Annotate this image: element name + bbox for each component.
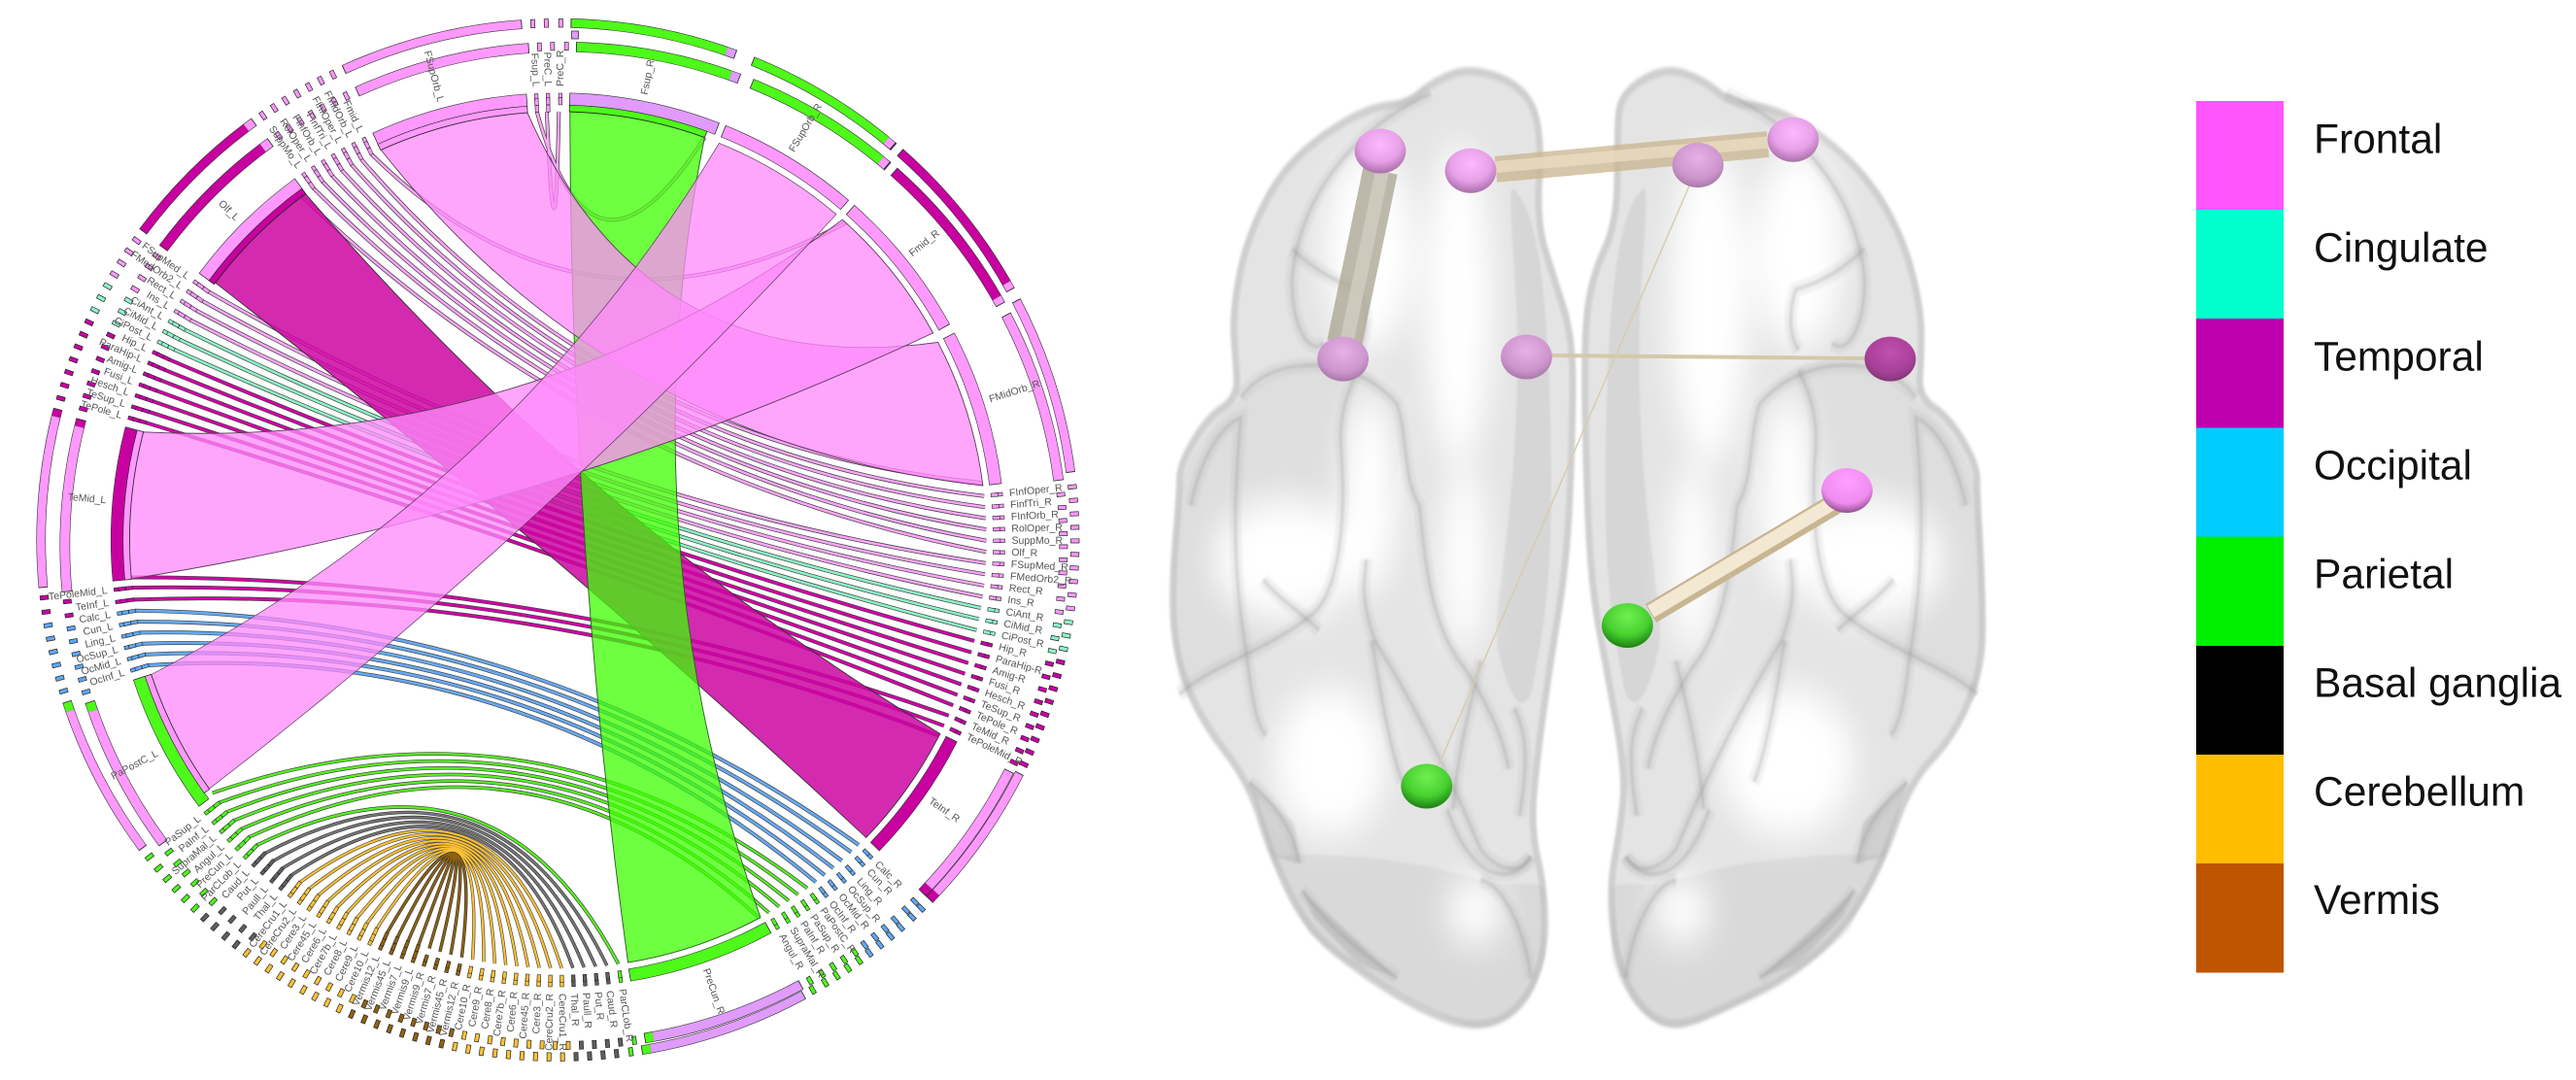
region name labels: Paull_L <box>240 884 271 917</box>
region name labels: FInfOrb_R <box>1011 509 1060 523</box>
region name labels: CiAnt_L <box>128 294 166 322</box>
region name labels: TeSup_R <box>979 698 1023 725</box>
region name labels: ParCLob_L <box>199 859 244 904</box>
region name labels: Vermis45_R <box>424 977 450 1034</box>
region name labels: FSupMed_R <box>1010 558 1068 573</box>
legend labels: Basal ganglia <box>2314 660 2562 707</box>
region name labels: PaSup_R <box>807 912 842 956</box>
region name labels: Fsup_R <box>639 58 658 96</box>
legend labels: Parietal <box>2314 552 2454 598</box>
region name labels: Cere9_L <box>333 943 361 984</box>
region name labels: SuppMo_L <box>266 123 304 171</box>
region name labels: Vermis9_R <box>401 970 427 1022</box>
region name labels: OcMid_L <box>80 656 122 678</box>
region name labels: Cere10_R <box>453 983 473 1031</box>
region name labels: ParaHip-L <box>97 336 144 365</box>
panel: legend <box>2196 101 2562 973</box>
region name labels: Thal_R <box>568 994 581 1027</box>
legend labels: Frontal <box>2314 117 2442 163</box>
region name labels: CereCru2_L <box>257 906 299 958</box>
region name labels: Caud_R <box>603 990 620 1029</box>
ribbon: Fmid_R to TeMid_L (frontal) <box>129 219 933 579</box>
region name labels: Hesch_L <box>89 375 131 398</box>
region name labels: TeInf_L <box>75 597 110 614</box>
region name labels: Calc_L <box>79 609 112 625</box>
region name labels: PreC_R <box>555 50 566 86</box>
region name labels: Vermis7_R <box>414 974 439 1026</box>
region name labels: RolOper_L <box>277 117 314 164</box>
region name labels: TeMid_R <box>969 721 1011 748</box>
region name labels: Ling_R <box>854 876 885 908</box>
region name labels: OcSup_L <box>75 644 119 665</box>
left hemisphere <box>1173 71 1573 1029</box>
region name labels: Cere7b_R <box>491 989 509 1037</box>
region name labels: Fsup_L <box>528 52 542 87</box>
legend colour bar <box>2196 101 2284 973</box>
region name labels: FSupOrb_R <box>787 101 825 154</box>
region name labels: Hip_L <box>119 332 150 354</box>
region name labels: PaPostC_L <box>109 748 160 782</box>
region name labels: FInfTri_L <box>304 111 334 152</box>
region name labels: Cere10_L <box>342 949 372 995</box>
region name labels: PaPostC_R <box>817 905 858 956</box>
region name labels: Cere7b_L <box>308 931 340 977</box>
region name labels: ParCLob_R <box>616 988 635 1043</box>
region name labels: Vermis9_L <box>390 966 416 1016</box>
region name labels: Cere8_R <box>479 988 496 1029</box>
region name labels: Amig-L <box>105 354 140 376</box>
panel: thin mirror connections of circular connectogram <box>131 112 987 987</box>
region name labels: FinfTri_R <box>1010 496 1053 511</box>
region name labels: Olf_L <box>216 198 242 223</box>
region name labels: PaSup_L <box>163 813 203 848</box>
region name labels: OcInf_L <box>88 667 126 689</box>
region name labels: Vermis12_L <box>351 954 383 1008</box>
region name labels: Fmid_R <box>907 227 942 259</box>
region name labels: Cere6_R <box>505 991 521 1032</box>
region name labels: CiMid_L <box>121 305 160 333</box>
region name labels: Hip_R <box>998 641 1028 659</box>
region name labels: Hesch_R <box>983 688 1027 713</box>
region name labels: CereCru2_R <box>543 993 556 1051</box>
region name labels: TeMid_L <box>67 491 107 506</box>
region name labels: TePole_L <box>80 398 123 422</box>
region name labels: Angul_R <box>776 932 806 972</box>
region name labels: PaInf_L <box>177 824 212 855</box>
region name labels: Fusi_L <box>102 366 135 388</box>
region name labels: FSupMed_L <box>140 240 191 282</box>
legend labels: Occipital <box>2314 443 2472 489</box>
brain region nodes <box>1317 118 1915 808</box>
region name labels: TePoleMid_R <box>965 731 1025 768</box>
ribbon: Fsup_R to PreCun_R (parietal) <box>570 112 761 962</box>
outer track 1: large region segments <box>41 23 1075 1057</box>
region name labels: FMedOrb2_L <box>128 249 185 292</box>
region name labels: CiMid_R <box>1002 618 1044 637</box>
region name labels: Thal_L <box>252 892 281 923</box>
region name labels: PreC_L <box>541 51 554 86</box>
right hemisphere <box>1585 71 1983 1029</box>
brain connections: cylinders between nodes <box>1344 142 1865 765</box>
region name labels: CiPost_L <box>112 315 154 344</box>
region name labels: Amig-R <box>991 664 1027 686</box>
inner track: large region segments <box>117 99 999 981</box>
region name labels: Cere45_R <box>518 992 532 1039</box>
region name labels: Cere45_L <box>286 920 320 963</box>
region name labels: FMidOrb_R <box>988 378 1041 405</box>
region name labels: Rect_R <box>1008 583 1044 597</box>
region name labels: SuppMo_R <box>1011 535 1063 547</box>
region name labels: CereCru1_R <box>557 994 568 1051</box>
region name labels: FMidOrb_L <box>322 89 356 140</box>
region name labels: Cere6_L <box>299 926 329 965</box>
region name labels: Put_L <box>235 875 261 903</box>
legend labels: Cingulate <box>2314 225 2489 272</box>
region name labels: TePole_R <box>974 710 1020 737</box>
region name labels: Cere9_R <box>466 985 485 1028</box>
region name labels: OcMid_R <box>836 892 871 932</box>
region name labels: Put_R <box>592 992 606 1021</box>
region name labels: Ins_R <box>1007 594 1035 609</box>
region name labels: SupraMal_R <box>788 926 827 980</box>
region name labels: Vermis12_R <box>438 980 461 1037</box>
region name labels: SupraMal_L <box>170 832 220 877</box>
region name labels: FInfOper_L <box>310 94 345 146</box>
region name labels: RolOper_R <box>1011 522 1063 535</box>
region name labels: Vermis45_L <box>362 959 393 1013</box>
region name labels: OcSup_R <box>845 884 883 926</box>
region name labels: Cere3_L <box>278 913 309 952</box>
region name labels: Fusi_R <box>987 676 1022 697</box>
region name labels: Ling_L <box>84 632 117 651</box>
region name labels: CiAnt_R <box>1005 606 1045 624</box>
region name labels: FInfOrb_L <box>289 113 324 157</box>
region name labels: Rect_L <box>145 275 179 302</box>
region name labels: CereCru1_L <box>247 898 289 950</box>
region name labels: Cere3_R <box>530 993 544 1034</box>
legend labels: Vermis <box>2314 878 2440 924</box>
region name labels: Cere8_L <box>322 937 351 978</box>
region name labels: Ins_L <box>145 289 172 312</box>
region name labels: PreCun_L <box>194 850 235 891</box>
region name labels: TePoleMid_L <box>48 585 108 603</box>
region name labels: FMedOrb2_R <box>1010 570 1072 588</box>
region name labels: PreCun_R <box>700 967 727 1016</box>
panel: translucent brain surface, top view <box>1173 71 1983 1029</box>
region name labels: Fmid_L <box>341 98 366 134</box>
ribbon: FSupOrb_R to PaPostC_L (frontal) <box>152 143 836 789</box>
region name labels: CiPost_R <box>1000 629 1045 651</box>
region name labels: Paull_R <box>580 993 593 1029</box>
legend labels: Temporal <box>2314 334 2484 381</box>
region name labels: TeInf_R <box>927 795 962 826</box>
region name labels: Vermis7_L <box>377 962 405 1012</box>
region name labels: Cun_R <box>864 866 895 898</box>
region name labels <box>48 50 1072 1051</box>
region name labels: Cun_L <box>83 621 114 638</box>
region name labels: Angul_L <box>191 841 227 875</box>
small region ticks on all tracks <box>40 18 1079 1061</box>
ribbon: FSupOrb_L to FMidOrb_R (frontal) <box>381 113 983 486</box>
outer track 2: large region segments <box>65 47 1063 1045</box>
ribbon: Olf_L to TeInf_R (temporal) <box>216 194 940 837</box>
region name labels: Olf_R <box>1011 547 1038 559</box>
region name labels: FInfOper_R <box>1008 482 1064 499</box>
region name labels: Calc_R <box>872 859 904 892</box>
region name labels: FSupOrb_L <box>422 50 446 104</box>
region name labels: OcInf_R <box>827 898 859 936</box>
legend labels <box>2314 117 2562 924</box>
region name labels: TeSup_L <box>85 387 127 410</box>
region name labels: ParaHip-R <box>995 654 1043 677</box>
legend labels: Cerebellum <box>2314 769 2525 816</box>
region name labels: Caud_L <box>220 867 253 901</box>
region name labels: PaInf_R <box>797 919 828 957</box>
